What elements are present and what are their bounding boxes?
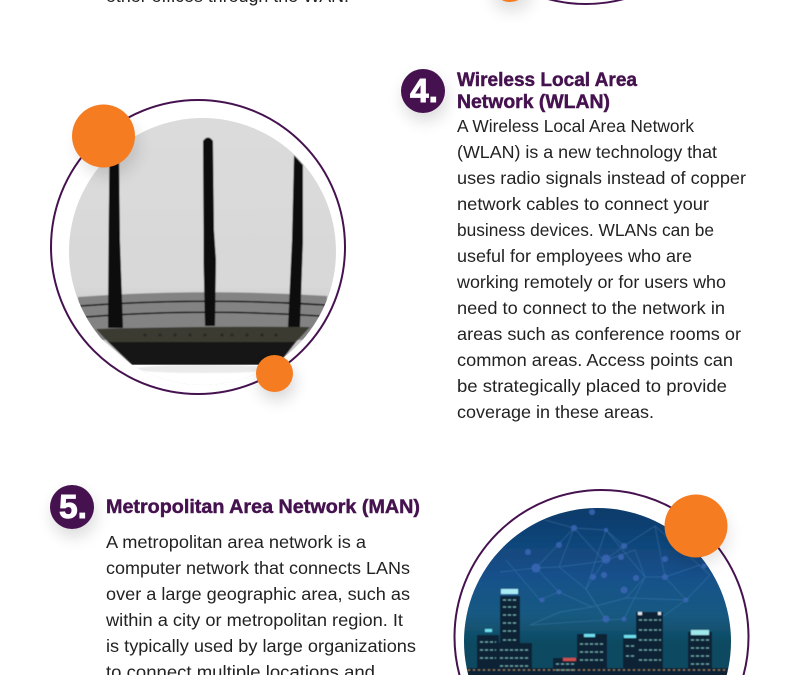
text block: WLAN description: working remotely or for users who (456, 272, 726, 292)
centre antenna (203, 138, 216, 326)
white side wedges below the router (102, 339, 132, 364)
badge: number 4: 4. (410, 72, 438, 109)
router front (96, 327, 310, 342)
badge: number 5: 5. (59, 488, 87, 525)
text block: WLAN description: coverage in these areas. (457, 402, 654, 422)
text block: MAN description (105, 532, 416, 675)
heading: MAN: Metropolitan Area Network (MAN) (106, 496, 420, 518)
panel: router photo (51, 100, 350, 400)
lit rooftops and windows (485, 589, 709, 638)
photo: router with three antennas (69, 118, 336, 385)
network nodes (525, 509, 706, 622)
buildings (464, 596, 734, 675)
heading: WLAN (457, 69, 637, 113)
text block: WLAN description: common areas. Access points can (457, 350, 733, 370)
heading: WLAN: Network (WLAN) (457, 91, 610, 113)
text block: MAN description: computer network that connects LANs (106, 558, 410, 578)
text block: MAN description: over a large geographic area, such as (106, 584, 410, 604)
text block: MAN description: within a city or metropolitan region. It (105, 610, 403, 630)
panel: WLAN text (401, 69, 746, 422)
text block: WLAN description: uses radio signals instead of copper (457, 168, 746, 188)
network lines (500, 520, 710, 630)
ring (51, 100, 345, 394)
badge: number 5 (50, 485, 96, 537)
ring (454, 490, 748, 675)
right antenna (288, 155, 303, 327)
text block: WLAN description: be strategically placed to provide (457, 376, 727, 396)
text block: WLAN description: A Wireless Local Area Network (457, 116, 694, 136)
badge: number 4 (401, 69, 447, 121)
panel: city photo (454, 490, 748, 675)
ring remnant (439, 0, 733, 4)
text block: WLAN description: business devices. WLANs can be (457, 220, 714, 240)
left antenna (108, 150, 123, 328)
icon: large orange dot (72, 104, 138, 176)
text block: WLAN description: network cables to connect your (457, 194, 709, 214)
text block: WLAN description: (WLAN) is a new technology that (457, 142, 717, 162)
icon: orange dot remnant (492, 0, 532, 12)
panel: MAN text (50, 485, 420, 675)
white base (132, 365, 258, 385)
text block: WLAN description: useful for employees who are (457, 246, 692, 266)
previous section remnant (106, 0, 733, 12)
icon: large orange dot (664, 494, 729, 565)
router lid (78, 292, 327, 340)
text block: WLAN description: areas such as conference rooms or (457, 324, 741, 344)
heading: WLAN: Wireless Local Area (457, 69, 637, 91)
text block: WLAN description (456, 116, 746, 422)
icon: small orange dot (256, 355, 295, 400)
text block: WLAN description: need to connect to the network in (457, 298, 725, 318)
text block: MAN description: is typically used by large organizations (106, 636, 416, 656)
text block: MAN description: A metropolitan area network is a (106, 532, 366, 552)
photo: city skyline with network overlay (460, 505, 735, 675)
